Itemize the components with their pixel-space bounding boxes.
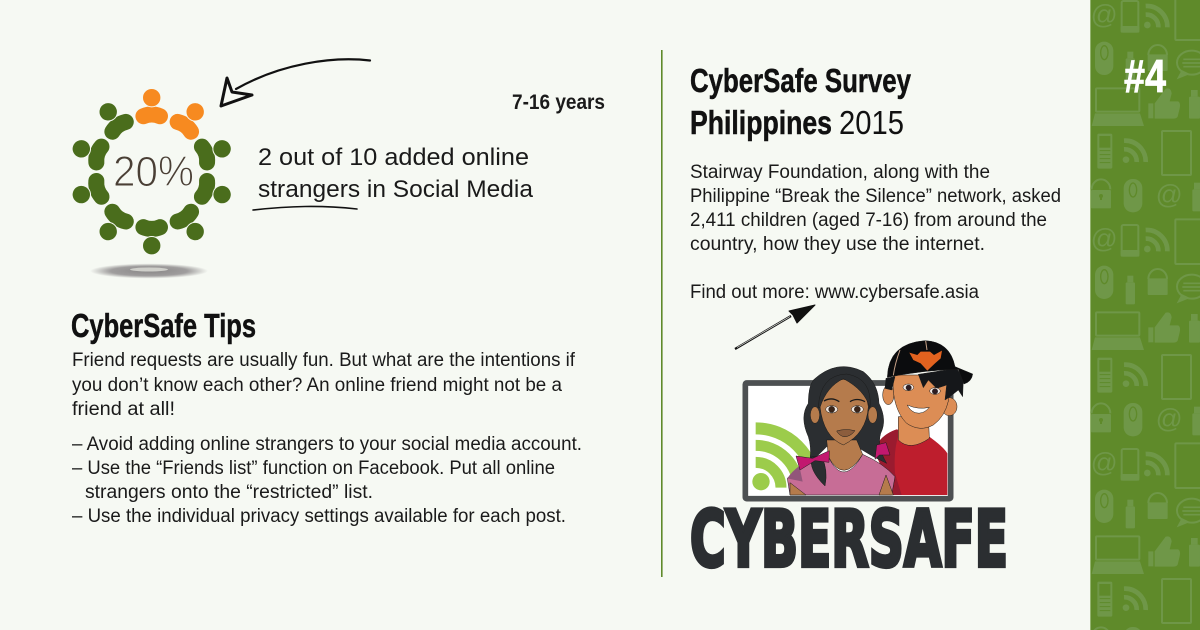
heading: survey title: CyberSafe Survey bbox=[690, 62, 912, 99]
statistic text bbox=[258, 144, 534, 203]
text block: survey description: Stairway Foundation, along with the bbox=[690, 162, 990, 183]
ring shadow bbox=[90, 264, 208, 278]
text block: tips list: – Use the “Friends list” function on Facebook. Put all online bbox=[72, 458, 555, 479]
hand-drawn arrow to ring bbox=[221, 59, 370, 106]
person 1 orange bbox=[142, 88, 161, 116]
text block: tips list bbox=[72, 434, 582, 527]
person 2 orange bbox=[177, 99, 208, 132]
heading: CyberSafe Tips: CyberSafe Tips bbox=[71, 307, 256, 344]
text block: survey description bbox=[690, 162, 1061, 255]
badge number: #4 bbox=[1124, 50, 1166, 102]
text block: tips intro: Friend requests are usually fun. But what are the intentions if bbox=[72, 350, 576, 371]
icon: rss signal bbox=[752, 428, 815, 490]
hand-drawn underline bbox=[253, 206, 357, 210]
link text: Find out more: www.cybersafe.asia bbox=[690, 282, 979, 303]
panel: green icon sidebar: @ bbox=[1156, 404, 1183, 434]
panel: green icon sidebar: @ bbox=[1091, 0, 1118, 30]
text block: tips intro: friend at all! bbox=[72, 399, 175, 420]
text block: tips list: strangers onto the “restricted” list. bbox=[85, 482, 373, 503]
panel: green icon sidebar bbox=[1090, 0, 1200, 630]
text block: tips intro: you don’t know each other? An online friend might not be a bbox=[72, 375, 562, 396]
eight green people bbox=[70, 99, 234, 255]
statistic text: 2 out of 10 added online bbox=[258, 144, 529, 171]
text block: tips list: – Use the individual privacy settings available for each post. bbox=[72, 506, 566, 527]
statistic text: strangers in Social Media bbox=[258, 176, 534, 203]
chart: 20% people ring bbox=[70, 88, 234, 255]
heading: survey title: 2015 bbox=[839, 104, 904, 141]
panel: green icon sidebar: @ bbox=[1091, 448, 1118, 478]
panel: green icon sidebar: @ bbox=[1156, 180, 1183, 210]
heading: survey title bbox=[690, 62, 912, 141]
monitor frame bbox=[745, 383, 951, 499]
girl bbox=[787, 367, 895, 495]
heading: survey title: Philippines bbox=[690, 104, 832, 141]
text block: survey description: country, how they use the internet. bbox=[690, 234, 985, 255]
logo illustration: kids in monitor bbox=[745, 341, 973, 499]
text block: survey description: 2,411 children (aged 7-16) from around the bbox=[690, 210, 1047, 231]
panel: green icon sidebar: @ bbox=[1091, 224, 1118, 254]
text block: survey description: Philippine “Break the Silence” network, asked bbox=[690, 186, 1061, 207]
age label: 7-16 years bbox=[512, 91, 605, 114]
divider bbox=[661, 50, 663, 577]
text block: tips intro bbox=[72, 350, 576, 420]
percentage: 20% bbox=[113, 148, 194, 196]
logo wordmark: CYBERSAFE bbox=[690, 495, 1008, 585]
text block: tips list: – Avoid adding online strangers to your social media account. bbox=[72, 434, 582, 455]
hand-drawn arrow to link bbox=[735, 305, 815, 349]
boy bbox=[874, 341, 973, 495]
